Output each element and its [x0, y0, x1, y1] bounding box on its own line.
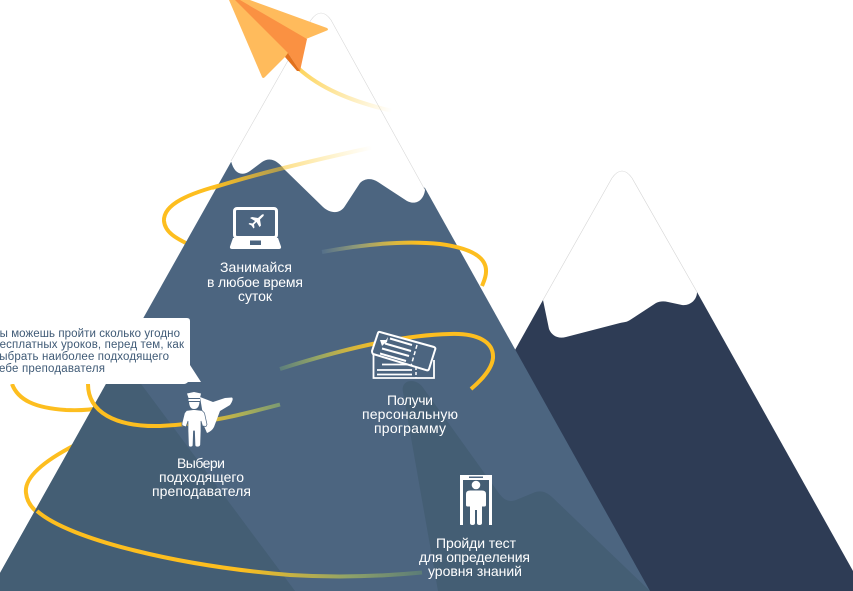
label: get program	[362, 392, 458, 436]
label: get program: Получи	[387, 392, 433, 408]
icon: tickets	[372, 332, 435, 378]
label: get program: программу	[374, 420, 446, 436]
label: choose teacher	[152, 455, 251, 499]
ribbon segment: plane trail	[298, 68, 392, 111]
ribbon segment: top pass	[212, 148, 372, 188]
ribbon segment: base pass	[37, 511, 422, 576]
label: take test: для определения	[419, 549, 530, 565]
front ticket	[372, 332, 435, 370]
icon: pilot and plane	[182, 392, 233, 447]
label: take test: уровня знаний	[428, 563, 522, 579]
label: take test	[419, 535, 530, 579]
shadow: lower left facet	[0, 357, 295, 591]
ribbon segment: laptop pass	[322, 243, 486, 286]
icon: paper plane	[229, 0, 328, 78]
icon: metal detector gate	[460, 475, 492, 525]
label: study anytime: суток	[238, 288, 273, 304]
label: study anytime: в любое время	[207, 274, 303, 290]
curve: ribbon behind main mountain	[12, 184, 225, 516]
label: choose teacher: подходящего	[159, 469, 244, 485]
ribbon segment: ticket pass	[280, 334, 493, 389]
callout: speech bubble	[0, 318, 201, 384]
snow cap: main peak	[231, 13, 425, 212]
ribbon segment: pilot pass	[88, 384, 280, 426]
snow cap: right peak	[543, 171, 697, 338]
back ticket	[374, 354, 434, 378]
label: study anytime: Занимайся	[220, 259, 292, 275]
curve: ribbon over mountains	[37, 68, 493, 576]
label: study anytime	[207, 259, 303, 304]
mountain: right back peak	[380, 171, 853, 591]
label: choose teacher: Выбери	[177, 455, 225, 471]
icon: laptop	[230, 208, 281, 249]
label: take test: Пройди тест	[436, 535, 517, 551]
label: choose teacher: преподавателя	[152, 483, 251, 499]
mountain: main front peak	[0, 13, 650, 591]
label: get program: персональную	[362, 406, 458, 422]
shadow: lower right facet	[403, 381, 650, 591]
